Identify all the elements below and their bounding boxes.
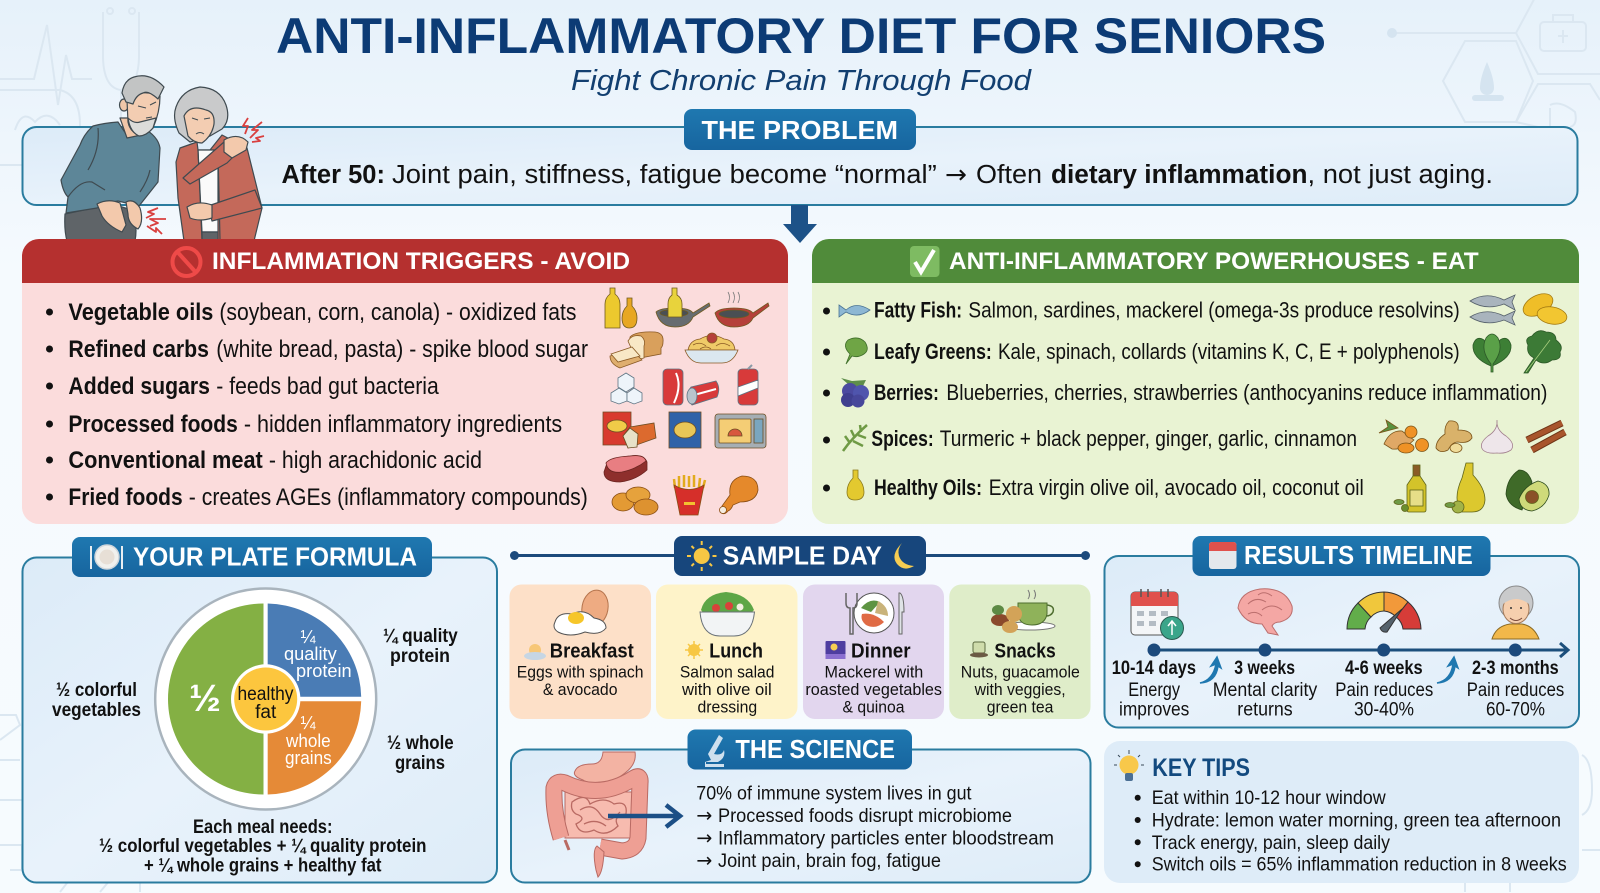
item: vegetable oils [46, 299, 576, 326]
card: snacks: with veggies, [974, 680, 1066, 699]
panel: results timeline [1104, 536, 1579, 728]
woman arm on shoulder [183, 142, 240, 184]
milestone: 4-6 weeks: Pain reduces [1335, 680, 1433, 701]
icon: egg [554, 588, 611, 635]
icons: fried foods [612, 475, 758, 515]
panel: inflammation triggers [22, 239, 788, 524]
card: lunch [656, 584, 798, 719]
problem statement: dietary inflammation [1051, 161, 1308, 189]
small intestine [565, 792, 633, 838]
item: leafy greens [823, 338, 1460, 364]
key tips heading: KEY TIPS [1152, 754, 1250, 782]
rectum [594, 846, 604, 877]
milestone: 10-14 days: Energy [1128, 680, 1180, 701]
card: dinner: Mackerel with [824, 662, 923, 682]
card: breakfast: Breakfast [550, 640, 634, 662]
plate labels: ½ whole [387, 733, 454, 754]
card: lunch: with olive oil [681, 680, 772, 699]
science text: Processed foods disrupt microbiome [718, 805, 1012, 827]
key tips list [1135, 787, 1567, 876]
illustration: senior couple in pain [61, 76, 264, 241]
icon: light bulb [1114, 750, 1144, 781]
item: fatty fish: Salmon, sardines, mackerel (omega-3s produce resolvins) [968, 298, 1460, 322]
icon: dinner plate [846, 593, 904, 634]
milestone: 2-3 months: 2-3 months [1472, 658, 1559, 679]
item: conventional meat: Conventional meat [68, 447, 263, 474]
sample day badge: SAMPLE DAY [723, 540, 882, 570]
icons: olive oil and avocado [1394, 463, 1549, 513]
item: spices: Spices: [871, 426, 934, 451]
plate chart: ¼ [300, 627, 316, 647]
icon: sun [687, 541, 716, 571]
card: snacks: green tea [987, 698, 1054, 716]
problem badge: THE PROBLEM [702, 115, 898, 145]
arrow: gut to text [608, 805, 680, 827]
science text: → [696, 849, 712, 872]
powerhouses header [812, 239, 1579, 283]
woman hair and face [175, 87, 228, 142]
item: added sugars: - feeds bad gut bacteria [216, 373, 439, 400]
plate chart: ½ [189, 678, 221, 720]
icons: sugar and soda [611, 365, 758, 405]
plate labels: ½ colorful [56, 680, 137, 701]
panel: the science [511, 730, 1090, 882]
icon: calendar [1209, 542, 1236, 569]
card: dinner: Dinner [851, 640, 911, 662]
science text [696, 782, 1054, 872]
card: snacks: Nuts, guacamole [961, 662, 1080, 682]
arrow: second progress [1437, 657, 1458, 683]
plate badge [72, 537, 432, 577]
card: lunch: Salmon salad [680, 662, 774, 682]
item: fatty fish [823, 298, 1460, 322]
plate labels [52, 626, 458, 774]
card: snacks: Snacks [994, 640, 1056, 662]
item: added sugars [46, 373, 439, 400]
item: spices [823, 425, 1357, 451]
icons: bread and pasta [610, 332, 738, 368]
item: added sugars: Added sugars [68, 373, 210, 400]
plate chart: whole [285, 731, 331, 751]
item: leafy greens: Kale, spinach, collards (vitamins K, C, E + polyphenols) [998, 339, 1460, 364]
icon: nuts and tea [991, 590, 1055, 633]
appendix [565, 840, 569, 850]
triggers header [22, 239, 788, 283]
item: healthy oils: Extra virgin olive oil, avocado oil, coconut oil [989, 475, 1364, 500]
plate chart: protein [296, 661, 352, 681]
man sweater [61, 122, 160, 213]
milestone: 3 weeks: Mental clarity [1213, 680, 1318, 701]
item: fried foods: - creates AGEs (inflammatory compounds) [189, 484, 588, 511]
icons: meat [604, 456, 647, 482]
item: refined carbs: (white bread, pasta) - spike blood sugar [216, 336, 588, 363]
milestone: 3 weeks [1213, 658, 1318, 720]
icon: plate and cutlery [91, 545, 122, 569]
subtitle: Fight Chronic Pain Through Food [571, 65, 1032, 97]
item: processed foods: - hidden inflammatory ingredients [244, 411, 562, 438]
panel: your plate formula [22, 537, 497, 882]
large intestine outline [554, 777, 640, 851]
icon: sunrise [524, 644, 546, 660]
card: dinner [803, 584, 944, 719]
item: leafy greens: Leafy Greens: [874, 339, 992, 364]
icon: check [910, 246, 940, 277]
card: snacks [949, 584, 1090, 719]
icon: salad [700, 592, 754, 636]
plate chart [155, 588, 376, 810]
problem statement: , not just aging. [1308, 161, 1493, 189]
plate badge: YOUR PLATE FORMULA [133, 542, 417, 572]
man trousers [65, 204, 136, 241]
item: healthy oils [823, 470, 1364, 500]
healthy fat center [231, 664, 300, 734]
card: dinner: roasted vegetables [805, 680, 942, 699]
milestone: 10-14 days [1112, 658, 1196, 720]
icon: moon [894, 543, 914, 569]
science text: Inflammatory particles enter bloodstream [718, 828, 1054, 850]
icons: processed foods [603, 412, 766, 448]
milestone: 2-3 months [1467, 658, 1564, 720]
icons: fish and omega-3 capsules [1470, 289, 1568, 326]
panel: the problem [22, 109, 1578, 205]
card: breakfast: & avocado [543, 680, 618, 699]
science badge [688, 730, 912, 770]
panel: anti-inflammatory powerhouses [812, 239, 1579, 524]
woman cardigan [176, 135, 262, 241]
timeline badge: RESULTS TIMELINE [1244, 540, 1473, 570]
item: vegetable oils: Vegetable oils [68, 299, 213, 326]
icon: prohibited [172, 248, 200, 276]
problem statement: Joint pain, stiffness, fatigue become “normal” [392, 161, 937, 189]
meal formula: + ¼ whole grains + healthy fat [144, 856, 382, 876]
card: lunch: Lunch [709, 640, 763, 662]
panel: key tips [1104, 741, 1579, 883]
stomach [574, 752, 635, 783]
icon: digestive system [554, 752, 640, 877]
science text: 70% of immune system lives in gut [696, 782, 972, 804]
icon: sun [685, 641, 703, 659]
icon: night sky [826, 641, 846, 659]
milestone: 2-3 months: 60-70% [1486, 700, 1545, 720]
problem statement: After 50: [282, 161, 385, 189]
quarter protein [268, 604, 361, 697]
problem statement: → [945, 160, 967, 190]
icons: oils [605, 288, 769, 328]
pain bolts [146, 118, 264, 234]
icon: microscope [705, 735, 724, 767]
item: processed foods: Processed foods [68, 411, 238, 438]
icon: brain [1238, 589, 1292, 635]
item: conventional meat [46, 447, 482, 474]
plate chart: grains [285, 748, 332, 768]
science badge: THE SCIENCE [735, 734, 895, 764]
science text: Joint pain, brain fog, fatigue [718, 850, 941, 872]
icon: pain gauge [1347, 592, 1421, 632]
meal formula: Each meal needs: [193, 817, 332, 838]
plate chart: fat [255, 702, 277, 723]
problem statement: Often [976, 161, 1042, 189]
card: breakfast: Eggs with spinach [517, 662, 644, 682]
item: conventional meat: - high arachidonic acid [269, 447, 482, 474]
item: vegetable oils: (soybean, corn, canola) - oxidized fats [219, 299, 576, 326]
arrow: first progress [1200, 657, 1221, 683]
timeline axis [1148, 643, 1568, 657]
problem statement [282, 160, 1493, 190]
plate labels: vegetables [52, 700, 141, 721]
item: refined carbs: Refined carbs [68, 336, 209, 363]
plate chart: healthy [238, 684, 294, 705]
item: healthy oils: Healthy Oils: [874, 475, 982, 500]
plate chart: ¼ [300, 713, 316, 733]
triggers header: INFLAMMATION TRIGGERS - AVOID [212, 248, 630, 275]
item: fried foods: Fried foods [68, 484, 183, 511]
timeline badge [1192, 536, 1490, 576]
item: processed foods [46, 411, 562, 438]
section: sample day [510, 536, 1090, 719]
key tips list: Switch oils = 65% inflammation reduction in 8 weeks [1152, 854, 1567, 876]
card: dinner: & quinoa [842, 698, 905, 716]
arrow: problem to lists [783, 205, 817, 243]
science text: → [696, 804, 712, 827]
woman [175, 87, 262, 241]
card: lunch: dressing [698, 698, 757, 716]
title: ANTI-INFLAMMATORY DIET FOR SENIORS [276, 8, 1326, 64]
man [61, 76, 164, 241]
woman arm on waist [208, 190, 262, 221]
woman shirt [198, 150, 218, 232]
key tips list: Track energy, pain, sleep daily [1152, 832, 1390, 854]
man neck and head [120, 118, 146, 138]
problem badge [684, 109, 916, 150]
milestone: 2-3 months: Pain reduces [1467, 680, 1564, 701]
plate labels: protein [390, 646, 450, 667]
man hands on knee [97, 201, 126, 232]
sample day badge [674, 536, 926, 576]
milestone: 3 weeks: 3 weeks [1234, 658, 1295, 679]
icons: spinach and kale [1473, 331, 1561, 373]
meal formula [99, 817, 426, 876]
item: refined carbs [46, 336, 588, 363]
quarter grains [268, 701, 361, 794]
triggers list [46, 299, 588, 511]
milestone: 4-6 weeks: 30-40% [1354, 700, 1414, 720]
item: berries: Berries: [874, 380, 939, 405]
plate labels: grains [395, 753, 445, 774]
item: fatty fish: Fatty Fish: [874, 298, 962, 322]
milestone: 10-14 days: improves [1119, 700, 1189, 720]
meal formula: ½ colorful vegetables + ¼ quality protein [99, 836, 426, 857]
powerhouses list [823, 298, 1547, 500]
milestone: 3 weeks: returns [1237, 700, 1293, 720]
powerhouses header: ANTI-INFLAMMATORY POWERHOUSES - EAT [949, 248, 1479, 275]
item: fried foods [46, 484, 588, 511]
icon: matcha cup [970, 642, 988, 658]
milestone: 10-14 days: 10-14 days [1112, 658, 1196, 679]
milestone: 4-6 weeks [1335, 658, 1433, 720]
half vegetables [168, 604, 264, 795]
item: spices: Turmeric + black pepper, ginger, garlic, cinnamon [940, 426, 1357, 451]
icon: calendar with up arrow [1131, 589, 1184, 640]
icons: turmeric, ginger, garlic, cinnamon [1379, 420, 1565, 453]
card: breakfast [510, 584, 651, 719]
large intestine fill [554, 777, 640, 851]
key tips list: Eat within 10-12 hour window [1152, 787, 1387, 809]
item: berries [823, 378, 1547, 408]
plate labels: ¼ quality [383, 626, 458, 647]
milestone: 4-6 weeks: 4-6 weeks [1345, 658, 1423, 679]
icon: smiling senior [1492, 586, 1539, 639]
science text: → [696, 826, 712, 850]
plate chart: quality [284, 644, 337, 664]
key tips list: Hydrate: lemon water morning, green tea afternoon [1152, 810, 1561, 832]
